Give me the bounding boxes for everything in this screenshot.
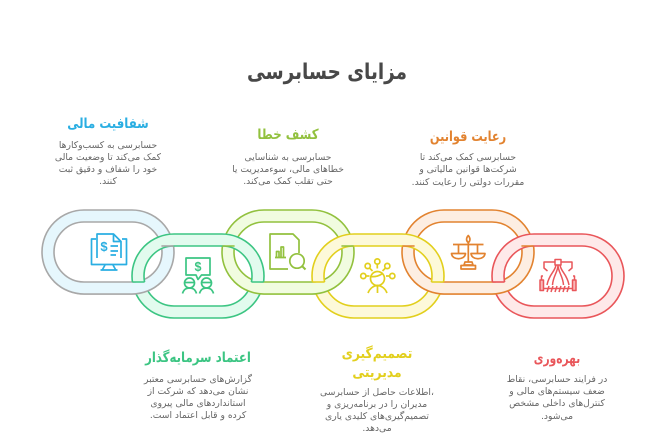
body: management decisions: تصمیم‌گیری‌های کلیدی یاری (325, 411, 429, 422)
icon: monitor with financial document: $ (100, 239, 108, 254)
body: error detection: حسابرسی به شناسایی (245, 152, 331, 163)
heading: management decisions: تصمیم‌گیری (342, 346, 412, 362)
heading: financial transparency: شفافیت مالی (67, 116, 149, 132)
body: financial transparency (55, 140, 161, 187)
heading: management decisions (342, 345, 412, 381)
body: error detection (232, 152, 344, 187)
body: financial transparency: حسابرسی به کسب‌وکارها (59, 140, 157, 151)
block: financial transparency (55, 116, 161, 187)
body: legal compliance: حسابرسی کمک می‌کند تا (420, 152, 516, 163)
interlocking lower sections of rings 1, 3, 5 (54, 282, 522, 295)
body: management decisions: مدیران را در برنامه‌ریزی و (327, 399, 427, 410)
body: efficiency: کنترل‌های داخلی مشخص (509, 398, 605, 409)
heading: investor confidence: اعتماد سرمایه‌گذار (145, 350, 251, 366)
ring 4 yellow (312, 234, 444, 318)
ring 2 green (132, 234, 264, 318)
body: financial transparency: کمک می‌کند تا وضعیت مالی (55, 152, 161, 163)
heading: legal compliance: رعایت قوانین (430, 129, 506, 145)
icon: document with magnifier (270, 234, 306, 270)
body: error detection: حتی تقلب کمک می‌کند. (243, 176, 333, 187)
ring 6 red (492, 234, 624, 318)
body: investor confidence: کرده و قابل اعتماد است. (150, 410, 246, 421)
icon: investors with dollar speech bubble (182, 258, 214, 294)
icon: monitor with financial document (92, 234, 126, 270)
body: investor confidence: استانداردهای مالی پیروی (150, 398, 246, 409)
body: efficiency: ضعف سیستم‌های مالی و (509, 386, 605, 397)
icon: manager with decision nodes (361, 259, 395, 293)
body: financial transparency: کنند. (99, 176, 117, 187)
body: management decisions: ،اطلاعات حاصل از حسابرسی (320, 387, 434, 398)
block: management decisions (320, 345, 434, 434)
body: legal compliance: شرکت‌ها قوانین مالیاتی و (419, 164, 517, 175)
ring chain with icons (41, 209, 625, 319)
ring 1 grey (42, 210, 174, 294)
heading: efficiency: بهره‌وری (534, 351, 580, 367)
title: مزایای حسابرسی (247, 60, 407, 85)
heading: management decisions: مدیریتی (352, 365, 402, 381)
block: investor confidence (144, 349, 252, 421)
body: efficiency: در فرایند حسابرسی، نقاط (507, 374, 607, 385)
crossing edge lines (132, 246, 534, 282)
ring 3 lime (222, 210, 354, 294)
body: management decisions (320, 387, 434, 434)
body: efficiency: می‌شود. (541, 411, 573, 422)
icon: scales of justice (452, 236, 485, 269)
block: error detection (232, 127, 344, 187)
body: investor confidence: گزارش‌های حسابرسی معتبر (144, 374, 252, 385)
icon: investors with dollar speech bubble: $ (195, 260, 202, 274)
body: efficiency (507, 374, 607, 422)
body: legal compliance (412, 152, 524, 188)
body: error detection: خطاهای مالی، سوءمدیریت یا (232, 164, 344, 175)
heading: error detection: کشف خطا (257, 127, 319, 143)
body: financial transparency: خود را شفاف و دقیق ثبت (59, 164, 157, 175)
icon: efficiency machine (540, 260, 576, 292)
ring 5 orange (402, 210, 534, 294)
body: investor confidence (144, 374, 252, 421)
block: efficiency (507, 351, 607, 422)
body: legal compliance: مقررات دولتی را رعایت کنند. (412, 177, 524, 188)
body: investor confidence: نشان می‌دهد که شرکت از (148, 386, 248, 397)
body: management decisions: می‌دهد. (362, 423, 392, 434)
block: legal compliance (412, 129, 524, 188)
